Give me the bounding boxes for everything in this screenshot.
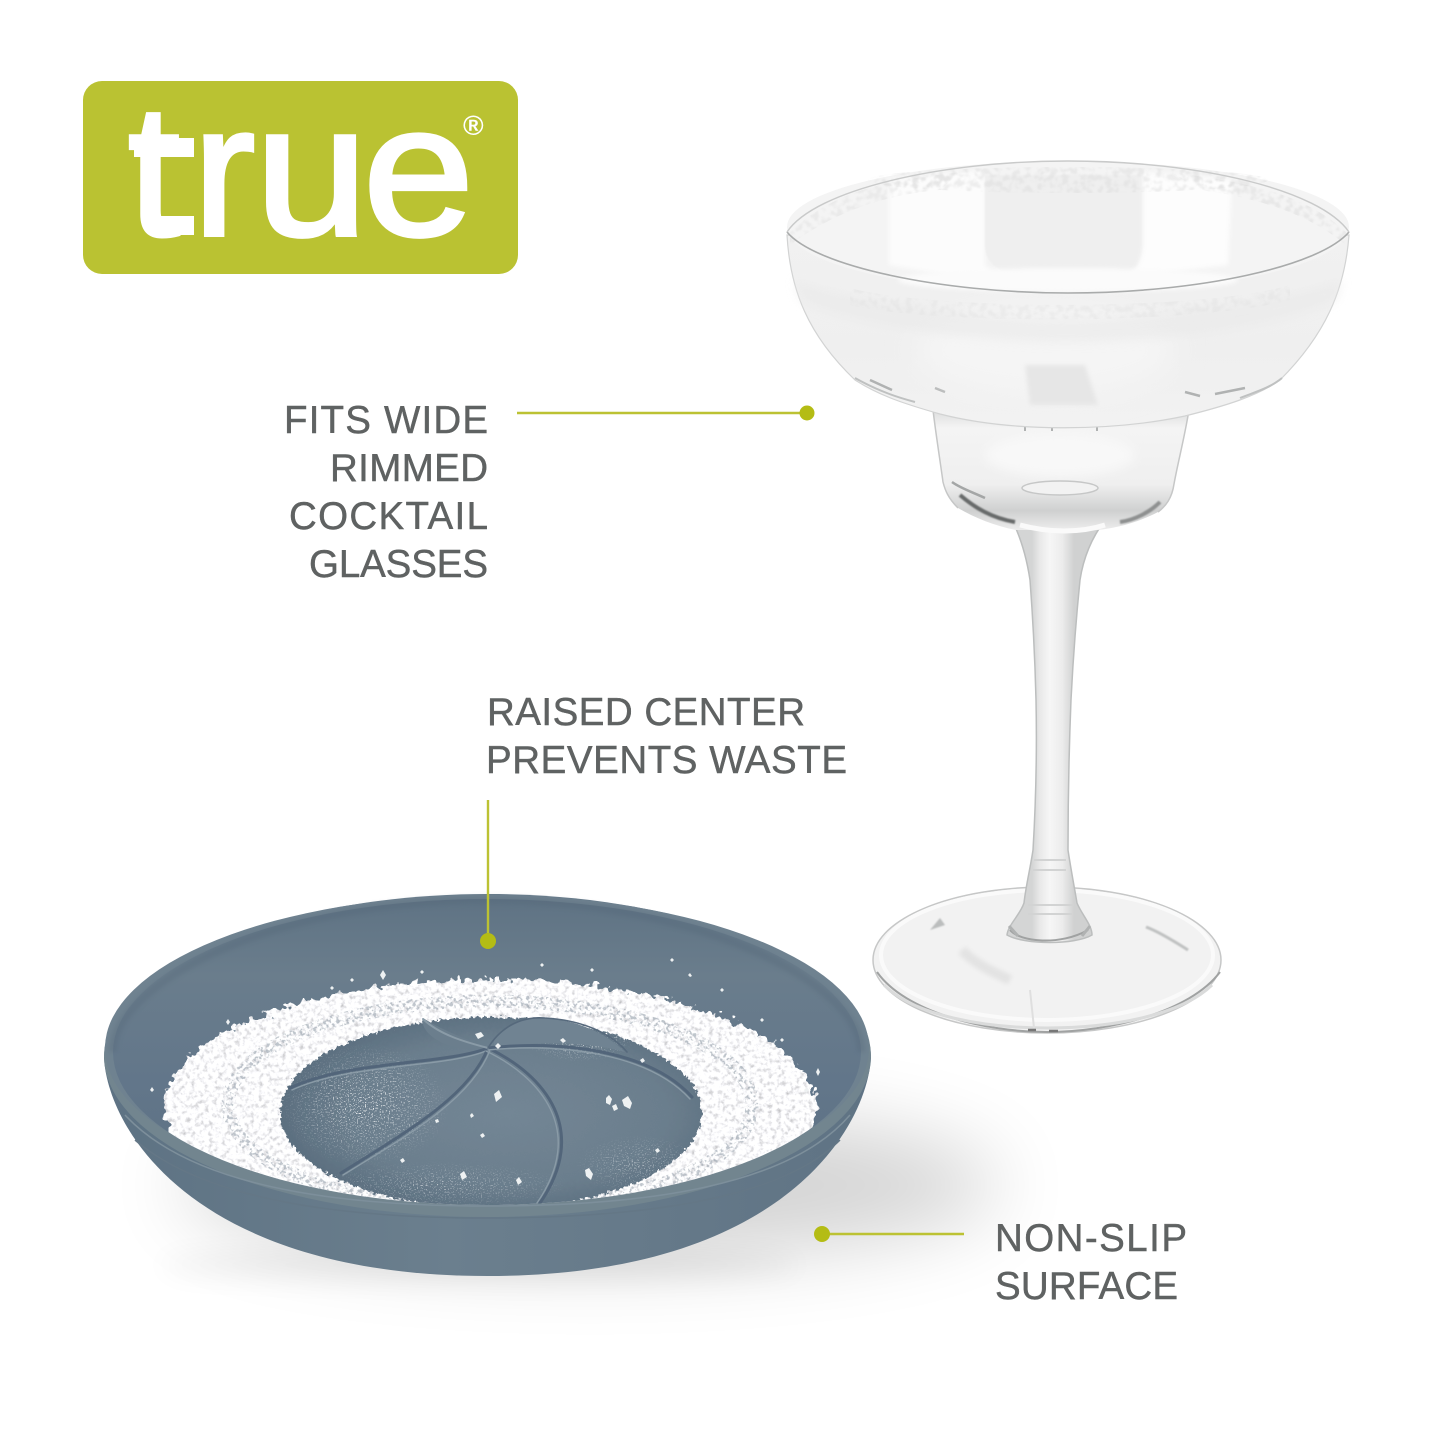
callout dot: [800, 406, 814, 420]
salt crystals on dome: [400, 1032, 660, 1185]
registered mark: ®: [463, 110, 484, 141]
logo wordmark: t: [128, 66, 180, 275]
callout: non-slip surface: [814, 1217, 1187, 1308]
callout leader line: [517, 412, 807, 414]
glass stem: [1007, 520, 1105, 942]
callout: raised center: [480, 691, 847, 949]
callout text: RAISED CENTER: [487, 691, 805, 734]
callout text: GLASSES: [309, 543, 488, 586]
dust on dome: [286, 1046, 444, 1163]
stray salt on wall: [150, 958, 820, 1093]
logo wordmark: e: [363, 66, 474, 275]
logo badge: [83, 66, 518, 275]
callout: fits wide rimmed glasses: [284, 399, 814, 586]
margarita glass: [787, 161, 1349, 1033]
callout text: SURFACE: [995, 1265, 1178, 1308]
dish shadow: [160, 1110, 1000, 1279]
callout dot: [480, 933, 496, 949]
glass foot: [873, 887, 1221, 1033]
salt groove: [228, 1001, 752, 1209]
dish interior wall: [113, 899, 861, 1205]
callout text: RIMMED: [330, 447, 488, 490]
rim line: [787, 232, 1349, 293]
glass rim opening: [787, 161, 1349, 319]
front rim highlight: [125, 1115, 850, 1206]
logo wordmark: u: [255, 66, 368, 275]
interior contents: [164, 979, 816, 1235]
dish rim band: [104, 895, 871, 1217]
lower cup: [933, 397, 1189, 531]
callout text: COCKTAIL: [289, 495, 488, 538]
callout dot: [814, 1226, 830, 1242]
callout leader line: [822, 1233, 964, 1235]
salt rimmer dish: [104, 894, 871, 1276]
salted rim: [868, 167, 1268, 193]
salt ring: [164, 979, 816, 1235]
logo t crossbar and foot: [134, 138, 194, 235]
callout leader line: [487, 800, 489, 941]
callout text: NON-SLIP: [995, 1217, 1187, 1260]
petal ridges: [290, 1018, 692, 1203]
callout text: FITS WIDE: [284, 399, 488, 442]
logo wordmark: r: [193, 66, 255, 275]
dish outer body: [104, 894, 871, 1276]
glass bowl: [787, 235, 1349, 428]
petal lobes: [422, 1018, 443, 1032]
callout text: PREVENTS WASTE: [486, 739, 847, 782]
raised center dome: [280, 1017, 702, 1209]
logo background: [83, 81, 518, 274]
